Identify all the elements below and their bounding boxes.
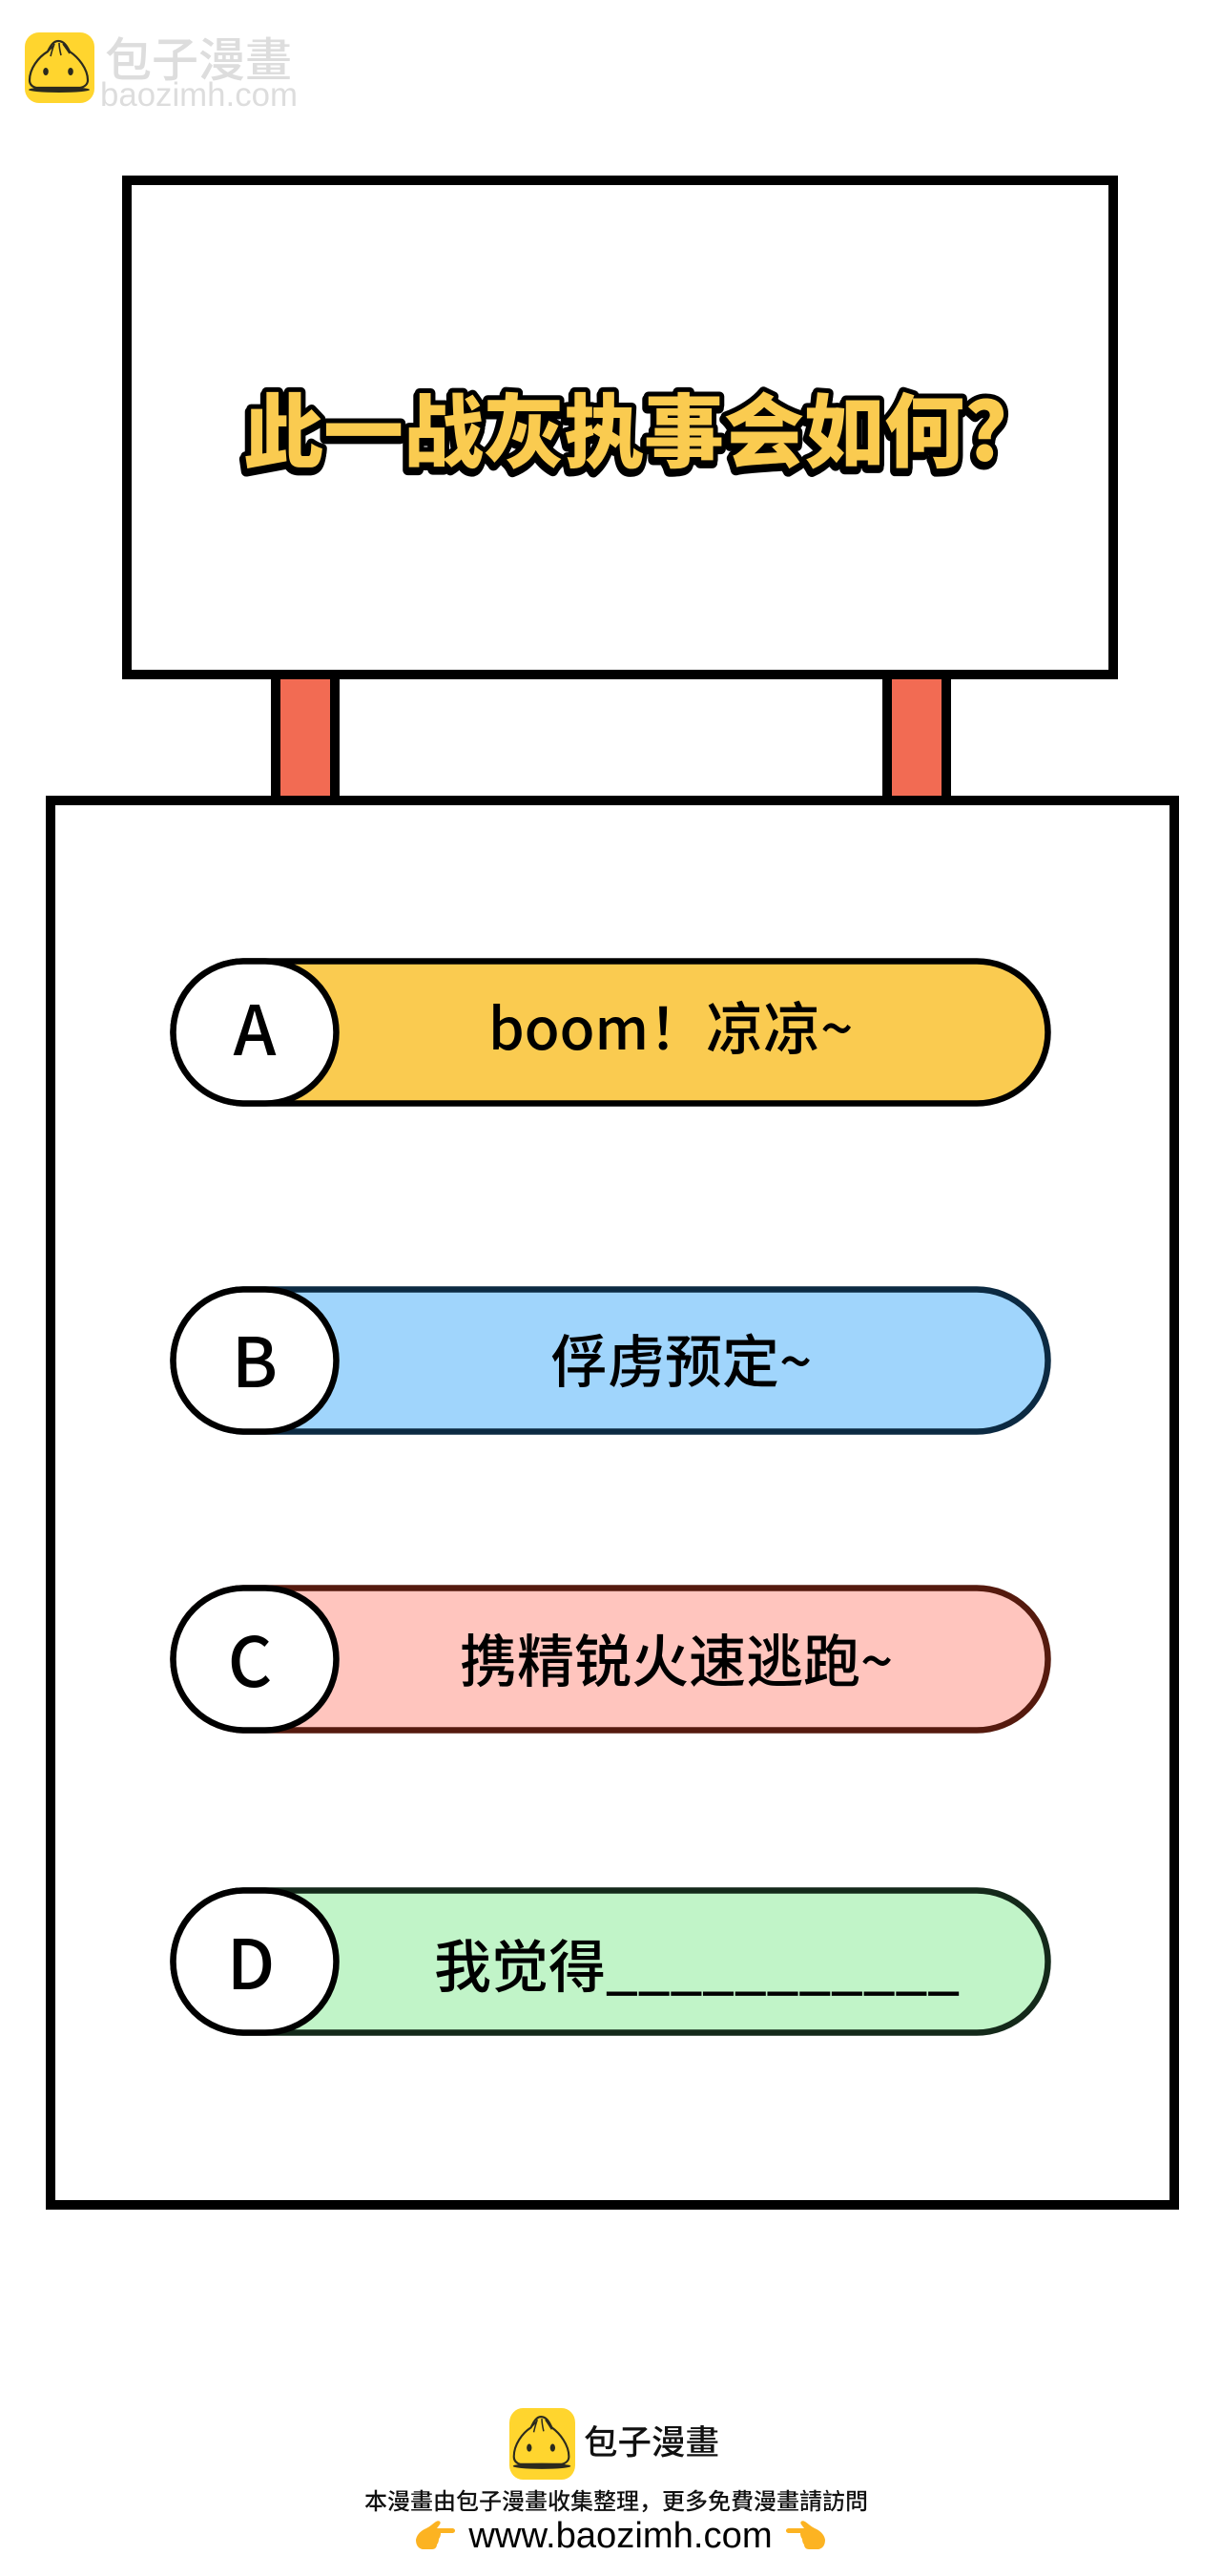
- right signpost: [887, 675, 946, 800]
- top logo url: baozimh.com: [100, 76, 298, 114]
- footer url: www.baozimh.com: [467, 2515, 773, 2556]
- bottom logo wordmark: 包子漫畫: [584, 2416, 719, 2464]
- option D: 我觉得___________: [434, 1922, 960, 2005]
- option A: A: [234, 975, 277, 1075]
- panel: billboard: [127, 180, 1113, 675]
- top logo wordmark: 包子漫畫: [105, 23, 292, 91]
- option D: [174, 1891, 1047, 2032]
- option A: [174, 962, 1047, 1103]
- icon: pointing hand right: [786, 2521, 825, 2549]
- panel: options: [51, 800, 1174, 2205]
- option B: [174, 1290, 1047, 1431]
- title: 此一战灰执事会如何?: [242, 372, 1006, 488]
- title: 此一战灰执事会如何?: [243, 369, 1007, 485]
- left signpost: [276, 675, 335, 800]
- icon: pointing hand left: [416, 2521, 455, 2549]
- option B: 俘虏预定~: [550, 1317, 812, 1400]
- option C: C: [228, 1607, 272, 1707]
- footer notice: 本漫畫由包子漫畫收集整理，更多免費漫畫請訪問: [364, 2483, 868, 2516]
- option D: D: [227, 1909, 275, 2009]
- option A: boom！凉凉~: [488, 984, 853, 1067]
- icon: top baozi logo: [25, 32, 94, 103]
- icon: bottom baozi logo: [509, 2408, 575, 2480]
- option C: 携精锐火速逃跑~: [460, 1616, 893, 1699]
- option C: [174, 1588, 1047, 1731]
- option B: B: [232, 1307, 278, 1407]
